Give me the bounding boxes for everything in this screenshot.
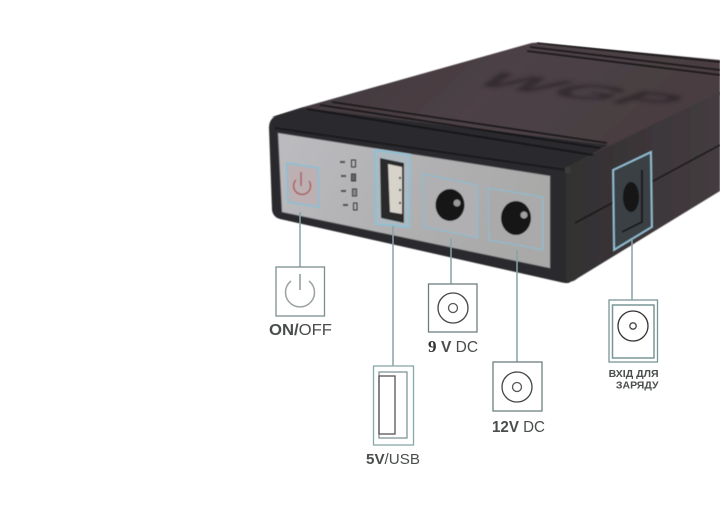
power button bbox=[287, 163, 319, 207]
charging input label: ВХІД ДЛЯ bbox=[609, 368, 658, 380]
side seam bbox=[575, 145, 720, 223]
power bank device bbox=[269, 43, 720, 283]
12V icon box bbox=[493, 362, 542, 411]
device top surface bbox=[272, 43, 720, 168]
ON/OFF icon box bbox=[276, 267, 324, 316]
connector lines bbox=[300, 212, 632, 366]
device front frame bbox=[269, 108, 608, 283]
side charging input bbox=[613, 152, 652, 250]
corner screw bbox=[564, 166, 572, 174]
battery level indicators bbox=[340, 160, 357, 210]
12V DC label: 12V DC bbox=[492, 419, 545, 436]
silver front panel bbox=[278, 133, 550, 268]
9V DC label: 9 bbox=[428, 337, 436, 356]
USB port bbox=[375, 150, 410, 227]
5V USB label: 5V/USB bbox=[366, 451, 420, 468]
charging input label: ЗАРЯДУ bbox=[616, 380, 659, 392]
charging input icon box bbox=[609, 300, 658, 362]
9V DC label: V DC bbox=[441, 339, 478, 356]
5V USB icon box bbox=[374, 366, 414, 445]
9V jack bbox=[423, 174, 478, 238]
charging input label bbox=[609, 368, 659, 392]
ON/OFF label: ON/OFF bbox=[269, 322, 332, 339]
12V jack bbox=[488, 188, 543, 250]
9V DC label bbox=[428, 337, 478, 356]
device bevel stripes bbox=[275, 43, 720, 170]
embossed logo on top: WGP bbox=[457, 69, 700, 113]
device right side bbox=[566, 92, 720, 282]
9V icon box bbox=[428, 284, 477, 332]
